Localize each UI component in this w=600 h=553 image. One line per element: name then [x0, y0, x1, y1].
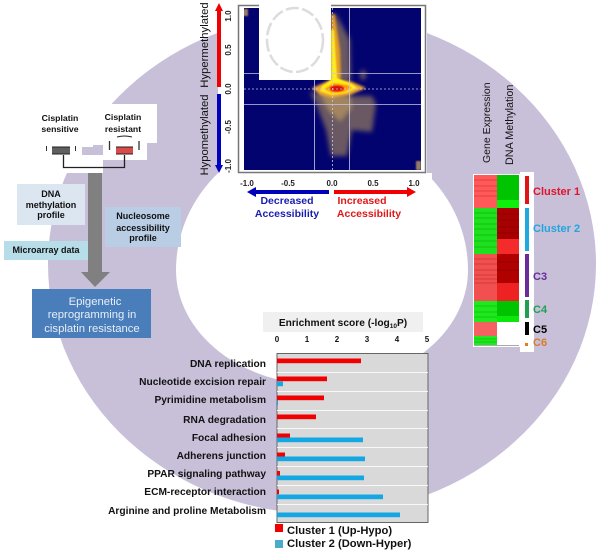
box: nucleosome accessibility profile: [105, 207, 181, 247]
axis ticks: 0: [275, 335, 280, 344]
pathway labels: PPAR signaling pathway: [147, 469, 266, 480]
label: cisplatin sensitive: sensitive: [41, 124, 79, 134]
y axis label: hypermethylated with red arrow: Hypermethylated: [199, 2, 211, 88]
axis title: 10: [390, 323, 397, 330]
red bars: cluster 1: [277, 358, 361, 494]
axis ticks: [275, 335, 430, 344]
box: nucleosome accessibility profile: accessibility: [116, 223, 170, 233]
y axis tick labels: -0.5: [224, 120, 233, 134]
box: DNA methylation profile: DNA: [41, 189, 61, 199]
x axis label: increased accessibility with red arrow: [334, 187, 416, 220]
cluster labels: Cluster 1: [533, 186, 580, 198]
heatmap: [473, 174, 520, 347]
x axis tick labels: 1.0: [408, 179, 420, 188]
icon: resistant dish: [110, 136, 139, 154]
cluster labels: C5: [533, 324, 547, 336]
x axis tick labels: -0.5: [281, 179, 295, 188]
axis ticks: 5: [425, 335, 430, 344]
legend: Cluster 1 (Up-Hypo): [287, 525, 392, 537]
pathway labels: RNA degradation: [183, 415, 266, 426]
box: DNA methylation profile: profile: [37, 210, 65, 220]
pathway labels: Arginine and proline Metabolism: [108, 506, 266, 517]
pathway labels: Pyrimidine metabolism: [154, 395, 266, 406]
box: epigenetic reprogramming: Epigenetic: [69, 296, 122, 308]
y axis tick labels: -1.0: [224, 159, 233, 173]
x axis label: decreased accessibility with blue arrow: Accessibility: [255, 208, 319, 220]
pathway labels: Focal adhesion: [192, 433, 266, 444]
icon: sensitive dish: [46, 146, 76, 154]
box: nucleosome accessibility profile: profile: [129, 233, 157, 243]
pathway labels: ECM-receptor interaction: [144, 487, 266, 498]
x axis label: increased accessibility with red arrow: Increased: [337, 195, 387, 207]
panel: methylation vs accessibility density plot: [199, 0, 432, 220]
cluster labels: C6: [533, 337, 547, 349]
plot background: [277, 354, 428, 522]
white inset covering plot corner: [259, 0, 331, 80]
x axis tick labels: [240, 179, 420, 188]
axis ticks: 4: [395, 335, 400, 344]
pathway labels: DNA replication: [190, 359, 266, 370]
panel: workflow: [0, 104, 181, 338]
bracket connecting cell lines: [64, 155, 124, 168]
box: DNA methylation profile: [17, 184, 85, 225]
x axis label: decreased accessibility with blue arrow: Decreased: [260, 195, 314, 207]
box: DNA methylation profile: methylation: [26, 200, 76, 210]
label: cisplatin resistant: resistant: [105, 124, 141, 134]
axis ticks: 3: [365, 335, 370, 344]
white backing behind cell lines: [0, 104, 157, 173]
box: microarray data: [4, 241, 88, 260]
cluster labels: C4: [533, 304, 548, 316]
pathway labels: Nucleotide excision repair: [139, 377, 266, 388]
column labels: [481, 82, 516, 165]
axis title: Enrichment score (-log: [279, 318, 390, 329]
cluster labels: Cluster 2: [533, 223, 580, 235]
box: nucleosome accessibility profile: Nucleosome: [116, 211, 170, 221]
label: cisplatin resistant: Cisplatin: [105, 112, 141, 122]
x axis tick labels: -1.0: [240, 179, 254, 188]
box: microarray data: Microarray data: [12, 245, 81, 255]
y axis tick labels: [224, 10, 233, 173]
x axis tick labels: 0.5: [367, 179, 379, 188]
column labels: DNA Methylation: [504, 85, 516, 165]
axis title: P): [397, 318, 407, 329]
y axis label: hypomethylated with blue arrow: Hypomethylated: [199, 95, 211, 175]
y axis tick labels: 1.0: [224, 10, 233, 22]
axis title: [263, 312, 423, 332]
y axis label: hypermethylated with red arrow: [199, 2, 223, 88]
arrow: down to epigenetic reprogramming: [81, 173, 110, 287]
legend: [275, 524, 412, 550]
cluster labels: [533, 186, 580, 349]
cluster bars: [520, 172, 534, 352]
plot area: [218, 0, 432, 191]
axis ticks: 1: [305, 335, 310, 344]
panel: enrichment bar chart: [108, 312, 430, 550]
panel: expression and methylation heatmap: [473, 82, 580, 352]
y axis tick labels: 0.5: [224, 44, 233, 56]
pathway labels: [108, 359, 266, 517]
label: cisplatin sensitive: Cisplatin: [42, 113, 78, 123]
x axis label: decreased accessibility with blue arrow: [247, 187, 329, 220]
column labels: Gene Expression: [481, 82, 493, 163]
cluster labels: C3: [533, 271, 547, 283]
x axis tick labels: 0.0: [326, 179, 338, 188]
x axis label: increased accessibility with red arrow: Accessibility: [337, 208, 401, 220]
y axis label: hypomethylated with blue arrow: [199, 94, 223, 175]
pathway labels: Adherens junction: [177, 451, 266, 462]
axis ticks: 2: [335, 335, 340, 344]
y axis tick labels: 0.0: [224, 83, 233, 95]
blue bars: cluster 2: [277, 382, 400, 517]
box: epigenetic reprogramming: reprogramming in: [48, 309, 136, 321]
box: epigenetic reprogramming: [32, 289, 151, 338]
legend: Cluster 2 (Down-Hyper): [287, 538, 412, 550]
box: epigenetic reprogramming: cisplatin resistance: [44, 323, 140, 335]
